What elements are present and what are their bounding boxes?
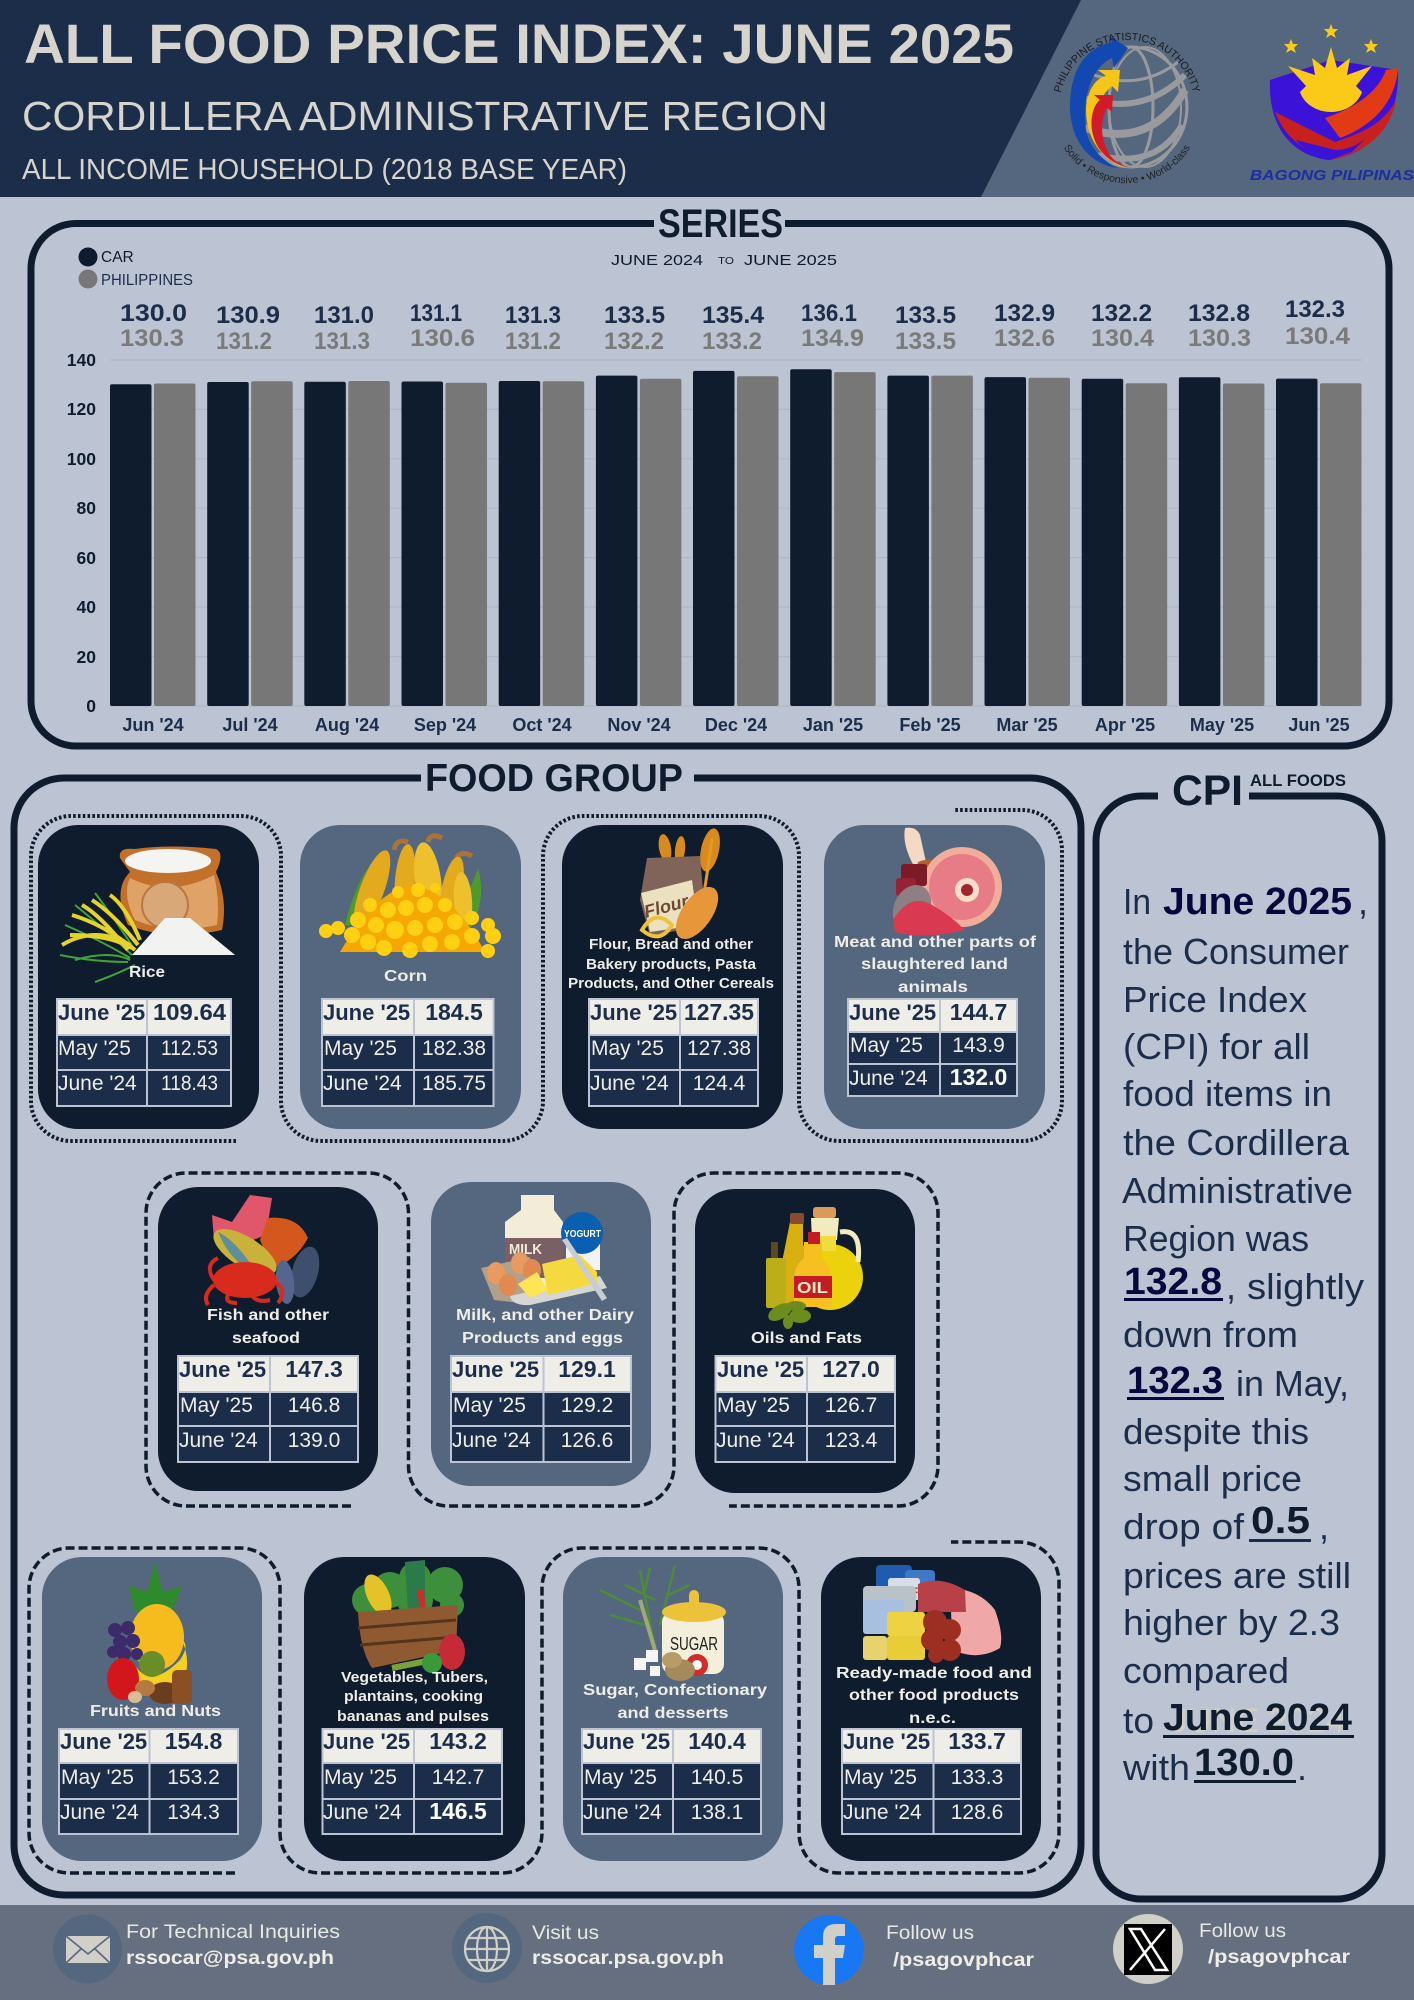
label: Fruits and Nuts bbox=[90, 1703, 221, 1720]
y axis labels: 120 bbox=[67, 399, 96, 419]
card: rice bbox=[38, 825, 259, 1129]
table: June '24 bbox=[58, 1072, 137, 1095]
table: 112.53 bbox=[161, 1037, 218, 1060]
x axis labels: Sep '24 bbox=[414, 715, 476, 735]
label bbox=[836, 1665, 1032, 1727]
narrative text: despite this bbox=[1123, 1411, 1309, 1452]
label bbox=[207, 1307, 329, 1347]
table: May '25 bbox=[58, 1037, 131, 1060]
y axis labels bbox=[67, 350, 96, 716]
narrative text: compared bbox=[1123, 1650, 1289, 1691]
table: 118.43 bbox=[161, 1072, 218, 1095]
label: n.e.c. bbox=[909, 1710, 956, 1727]
table: 129.1 bbox=[558, 1356, 616, 1382]
table: June '24 bbox=[590, 1072, 669, 1095]
narrative text: 132.8 bbox=[1124, 1261, 1222, 1303]
table: 109.64 bbox=[153, 999, 226, 1025]
table bbox=[451, 1356, 631, 1462]
table bbox=[848, 999, 1017, 1096]
narrative text: 0.5 bbox=[1251, 1500, 1310, 1542]
table: May '25 bbox=[61, 1766, 134, 1789]
table: May '25 bbox=[850, 1034, 923, 1057]
contact: facebook bbox=[794, 1915, 1035, 1985]
value labels: 130.3 bbox=[1188, 325, 1251, 352]
x axis labels: Jul '24 bbox=[222, 715, 278, 735]
table: 127.38 bbox=[687, 1037, 751, 1060]
table: 128.6 bbox=[951, 1801, 1003, 1824]
narrative text: Region was bbox=[1123, 1218, 1309, 1259]
x axis labels bbox=[122, 715, 1350, 735]
narrative text: In bbox=[1123, 881, 1151, 922]
table: June '24 bbox=[849, 1067, 928, 1090]
y axis labels: 100 bbox=[67, 449, 96, 469]
label bbox=[583, 1682, 767, 1722]
icon: milk, eggs and butter bbox=[481, 1195, 607, 1305]
x axis labels: Jan '25 bbox=[803, 715, 863, 735]
icon: sugar jar and cane: SUGAR bbox=[670, 1634, 718, 1654]
label bbox=[568, 937, 774, 992]
table: May '25 bbox=[324, 1766, 397, 1789]
table: June '24 bbox=[583, 1801, 662, 1824]
table bbox=[322, 1728, 502, 1834]
value labels: 132.9 bbox=[994, 300, 1055, 327]
value labels: 133.5 bbox=[604, 302, 665, 329]
x axis labels: Dec '24 bbox=[705, 715, 767, 735]
value labels: 133.5 bbox=[895, 328, 956, 355]
contact: facebook: /psagovphcar bbox=[893, 1950, 1035, 1971]
table: 153.2 bbox=[167, 1766, 220, 1789]
value labels: 131.0 bbox=[314, 302, 374, 329]
household subtitle: ALL INCOME HOUSEHOLD (2018 BASE YEAR) bbox=[22, 154, 627, 186]
heading: CPI: CPI bbox=[1172, 767, 1243, 815]
narrative text: June 2025 bbox=[1163, 881, 1352, 923]
table bbox=[589, 999, 758, 1106]
table: 147.3 bbox=[285, 1356, 343, 1382]
table: 140.4 bbox=[688, 1728, 746, 1754]
value labels: 132.3 bbox=[1285, 296, 1345, 323]
contact: website: rssocar.psa.gov.ph bbox=[532, 1948, 724, 1969]
icon: sugar jar and cane bbox=[600, 1565, 726, 1681]
card: ready-made food bbox=[821, 1557, 1041, 1861]
label: and desserts bbox=[618, 1705, 729, 1722]
table: June '25 bbox=[323, 1000, 410, 1025]
legend: PHILIPPINES bbox=[101, 272, 193, 289]
value labels: 130.3 bbox=[120, 325, 184, 352]
narrative text: . bbox=[1297, 1747, 1307, 1788]
table bbox=[59, 1728, 238, 1834]
heading: all foods: ALL FOODS bbox=[1250, 771, 1346, 790]
label: Corn bbox=[384, 968, 427, 985]
x axis labels: Feb '25 bbox=[899, 715, 961, 735]
table: 146.5 bbox=[429, 1798, 487, 1824]
table: June '24 bbox=[60, 1801, 139, 1824]
x axis labels: Oct '24 bbox=[512, 715, 572, 735]
value labels: 130.0 bbox=[120, 300, 187, 327]
contact: x: Follow us bbox=[1199, 1921, 1286, 1942]
table: June '24 bbox=[179, 1429, 258, 1452]
heading: series: SERIES bbox=[658, 202, 783, 246]
table: June '25 bbox=[849, 1000, 936, 1025]
y axis labels: 0 bbox=[86, 696, 96, 716]
x axis labels: Aug '24 bbox=[315, 715, 379, 735]
value labels: 131.3 bbox=[505, 302, 561, 329]
label: Products and eggs bbox=[462, 1330, 623, 1347]
legend bbox=[78, 248, 193, 289]
panel: food group bbox=[14, 757, 1081, 1895]
table: 132.0 bbox=[950, 1064, 1007, 1090]
table: 139.0 bbox=[288, 1429, 340, 1452]
value labels: 135.4 bbox=[702, 302, 765, 329]
value labels: 132.8 bbox=[1188, 300, 1250, 327]
icon: canned food and sausages bbox=[863, 1565, 1001, 1663]
table bbox=[178, 1356, 358, 1462]
footer band bbox=[0, 1905, 1414, 2000]
title: ALL FOOD PRICE INDEX: JUNE 2025 bbox=[24, 12, 1014, 75]
contact: email: For Technical Inquiries bbox=[126, 1922, 340, 1943]
label: Vegetables, Tubers, bbox=[341, 1670, 488, 1686]
card: oils bbox=[695, 1189, 915, 1493]
card: sugar bbox=[563, 1557, 783, 1861]
table: 123.4 bbox=[825, 1429, 878, 1452]
narrative text: the Cordillera bbox=[1123, 1122, 1350, 1163]
x axis labels: Mar '25 bbox=[996, 715, 1058, 735]
narrative text: in May, bbox=[1236, 1363, 1349, 1404]
value labels: 132.2 bbox=[1091, 300, 1152, 327]
value labels: 130.4 bbox=[1285, 323, 1351, 350]
card: corn bbox=[300, 825, 521, 1129]
icon: canned food and sausages: BEEF bbox=[890, 1585, 918, 1599]
table bbox=[582, 1728, 761, 1834]
card: vegetables bbox=[304, 1557, 525, 1861]
contact: facebook: Follow us bbox=[886, 1923, 974, 1944]
table: May '25 bbox=[584, 1766, 657, 1789]
logo: Philippine Statistics Authority: PHILIPPINE STATISTICS AUTHORITY bbox=[1054, 32, 1200, 92]
Philippines bars bbox=[154, 372, 1362, 706]
narrative text: (CPI) for all bbox=[1123, 1026, 1310, 1067]
table: June '25 bbox=[179, 1357, 266, 1382]
table: May '25 bbox=[591, 1037, 664, 1060]
x axis labels: Nov '24 bbox=[607, 715, 671, 735]
value labels: 130.6 bbox=[410, 325, 475, 352]
y axis labels: 40 bbox=[77, 597, 96, 617]
value labels: 130.9 bbox=[216, 302, 280, 329]
date range bbox=[611, 252, 837, 269]
bar chart bbox=[67, 296, 1362, 735]
table: 127.0 bbox=[822, 1356, 880, 1382]
table: 124.4 bbox=[693, 1072, 746, 1095]
table: May '25 bbox=[453, 1394, 526, 1417]
label: Oils and Fats bbox=[751, 1330, 862, 1347]
value labels: 131.1 bbox=[410, 300, 462, 327]
label: Products, and Other Cereals bbox=[568, 976, 774, 992]
table bbox=[842, 1728, 1021, 1834]
table: 126.7 bbox=[825, 1394, 877, 1417]
icon: vegetable crate bbox=[352, 1560, 465, 1673]
y axis labels: 60 bbox=[77, 548, 96, 568]
heading: food group: FOOD GROUP bbox=[425, 757, 683, 800]
label bbox=[456, 1307, 634, 1347]
value labels bbox=[120, 296, 1351, 355]
icon: flour bag and bread bbox=[640, 827, 726, 946]
label: slaughtered land bbox=[861, 956, 1008, 973]
table: June '25 bbox=[590, 1000, 677, 1025]
card: flour and bakery bbox=[562, 825, 783, 1129]
contact: website bbox=[452, 1913, 724, 1983]
table: June '25 bbox=[323, 1729, 410, 1754]
table: June '25 bbox=[452, 1357, 539, 1382]
logo: Bagong Pilipinas: BAGONG PILIPINAS bbox=[1250, 167, 1414, 184]
x axis labels: Jun '24 bbox=[122, 715, 184, 735]
table: 126.6 bbox=[561, 1429, 613, 1452]
card: fish bbox=[158, 1187, 378, 1491]
y axis labels: 20 bbox=[77, 647, 96, 667]
label: Bakery products, Pasta bbox=[586, 957, 757, 973]
narrative text: down from bbox=[1123, 1314, 1298, 1355]
table: May '25 bbox=[844, 1766, 917, 1789]
table: June '25 bbox=[58, 1000, 145, 1025]
logo: Bagong Pilipinas bbox=[1250, 24, 1414, 184]
contact: x: /psagovphcar bbox=[1208, 1947, 1351, 1968]
table: June '24 bbox=[323, 1072, 402, 1095]
x axis labels: May '25 bbox=[1190, 715, 1254, 735]
table: June '25 bbox=[717, 1357, 804, 1382]
narrative text: small price bbox=[1123, 1458, 1302, 1499]
narrative text bbox=[1122, 881, 1368, 1788]
label: Sugar, Confectionary bbox=[583, 1682, 767, 1699]
table: 143.9 bbox=[952, 1034, 1005, 1057]
label: animals bbox=[898, 979, 968, 996]
narrative text: food items in bbox=[1123, 1073, 1332, 1114]
table bbox=[57, 999, 231, 1106]
narrative text: June 2024 bbox=[1163, 1697, 1352, 1739]
value labels: 132.6 bbox=[994, 325, 1055, 352]
date range: JUNE 2025 bbox=[744, 252, 837, 269]
logo: Philippine Statistics Authority: Solid • Responsive • World-class bbox=[1064, 144, 1190, 184]
date range: TO bbox=[718, 256, 734, 267]
table: 133.7 bbox=[948, 1728, 1006, 1754]
narrative text: 130.0 bbox=[1194, 1742, 1294, 1784]
narrative text: prices are still bbox=[1123, 1555, 1351, 1596]
table: 142.7 bbox=[432, 1766, 484, 1789]
icon: milk, eggs and butter: YOGURT bbox=[564, 1229, 601, 1240]
label: Meat and other parts of bbox=[834, 934, 1037, 951]
value labels: 130.4 bbox=[1091, 325, 1155, 352]
narrative text: to bbox=[1123, 1700, 1154, 1741]
card: meat bbox=[824, 825, 1045, 1129]
table: June '24 bbox=[452, 1429, 531, 1452]
value labels: 132.2 bbox=[604, 328, 664, 355]
value labels: 133.2 bbox=[702, 328, 762, 355]
y axis labels: 140 bbox=[67, 350, 96, 370]
table: June '24 bbox=[716, 1429, 795, 1452]
table: 182.38 bbox=[422, 1037, 486, 1060]
table: 134.3 bbox=[167, 1801, 220, 1824]
icon: fruits and nuts bbox=[107, 1562, 192, 1704]
card: milk bbox=[431, 1182, 651, 1486]
table: 138.1 bbox=[691, 1801, 743, 1824]
label: bananas and pulses bbox=[337, 1709, 489, 1725]
table: 154.8 bbox=[165, 1728, 222, 1754]
narrative text: with bbox=[1122, 1747, 1190, 1788]
label: Fish and other bbox=[207, 1307, 329, 1324]
icon: flour bag and bread: Flour bbox=[642, 891, 691, 922]
narrative text: Administrative bbox=[1122, 1170, 1353, 1211]
label: Ready-made food and bbox=[836, 1665, 1032, 1682]
logo: Philippine Statistics Authority bbox=[1054, 32, 1200, 184]
icon: oil bottles bbox=[765, 1207, 863, 1329]
contact: email: rssocar@psa.gov.ph bbox=[126, 1948, 334, 1969]
table: June '25 bbox=[60, 1729, 147, 1754]
table: June '24 bbox=[843, 1801, 922, 1824]
value labels: 131.2 bbox=[505, 328, 561, 355]
table: 129.2 bbox=[561, 1394, 613, 1417]
label: other food products bbox=[849, 1687, 1019, 1704]
narrative text: the Consumer bbox=[1123, 931, 1349, 972]
value labels: 136.1 bbox=[801, 300, 857, 327]
label bbox=[834, 934, 1037, 996]
label: seafood bbox=[232, 1330, 300, 1347]
narrative text: higher by 2.3 bbox=[1123, 1602, 1340, 1643]
legend: CAR bbox=[101, 249, 134, 266]
panel: CPI all foods bbox=[1096, 767, 1382, 1899]
table: 144.7 bbox=[950, 999, 1007, 1025]
card: fruits bbox=[42, 1557, 262, 1861]
narrative text: drop of bbox=[1123, 1506, 1245, 1547]
narrative text: slightly bbox=[1247, 1266, 1364, 1307]
icon: corn bbox=[319, 836, 501, 958]
table: June '24 bbox=[323, 1801, 402, 1824]
contact: website: Visit us bbox=[532, 1923, 599, 1944]
x axis labels: Jun '25 bbox=[1288, 715, 1350, 735]
narrative text: , bbox=[1226, 1266, 1236, 1307]
date range: JUNE 2024 bbox=[611, 252, 703, 269]
value labels: 131.3 bbox=[314, 328, 370, 355]
narrative text: 132.3 bbox=[1127, 1360, 1223, 1402]
table: 127.35 bbox=[684, 999, 754, 1025]
label bbox=[337, 1670, 489, 1725]
table: 185.75 bbox=[422, 1072, 486, 1095]
table: 146.8 bbox=[288, 1394, 340, 1417]
value labels: 133.5 bbox=[895, 302, 956, 329]
value labels: 131.2 bbox=[216, 328, 272, 355]
table: May '25 bbox=[180, 1394, 253, 1417]
region subtitle: CORDILLERA ADMINISTRATIVE REGION bbox=[22, 93, 828, 139]
table: 184.5 bbox=[425, 999, 483, 1025]
icon: ham and meat bbox=[886, 828, 1002, 937]
y axis labels: 80 bbox=[77, 498, 96, 518]
table: 140.5 bbox=[691, 1766, 743, 1789]
icon: seafood bbox=[206, 1195, 324, 1305]
label: Rice bbox=[129, 964, 165, 981]
narrative text: JUNE 2024 bbox=[1170, 1702, 1345, 1740]
value labels: 134.9 bbox=[801, 325, 864, 352]
CAR bars bbox=[110, 369, 1318, 706]
table: June '25 bbox=[843, 1729, 930, 1754]
icon: milk, eggs and butter: MILK bbox=[509, 1241, 542, 1258]
table: 143.2 bbox=[429, 1728, 487, 1754]
table: 133.3 bbox=[951, 1766, 1003, 1789]
panel: series bbox=[31, 202, 1389, 746]
icon: oil bottles: OIL bbox=[797, 1280, 828, 1297]
table: May '25 bbox=[324, 1037, 397, 1060]
table: May '25 bbox=[717, 1394, 790, 1417]
table bbox=[716, 1356, 895, 1462]
x axis labels: Apr '25 bbox=[1095, 715, 1155, 735]
narrative text: , bbox=[1358, 881, 1368, 922]
narrative text: Price Index bbox=[1123, 979, 1307, 1020]
icon: rice sack bbox=[60, 846, 235, 982]
table bbox=[322, 999, 494, 1106]
contact: x bbox=[1113, 1914, 1351, 1984]
label: plantains, cooking bbox=[344, 1689, 483, 1705]
narrative text: , bbox=[1319, 1506, 1329, 1547]
table: June '25 bbox=[583, 1729, 670, 1754]
contact: email bbox=[53, 1914, 340, 1984]
label: Milk, and other Dairy bbox=[456, 1307, 634, 1324]
header band bbox=[0, 0, 1414, 197]
label: Flour, Bread and other bbox=[589, 937, 753, 953]
